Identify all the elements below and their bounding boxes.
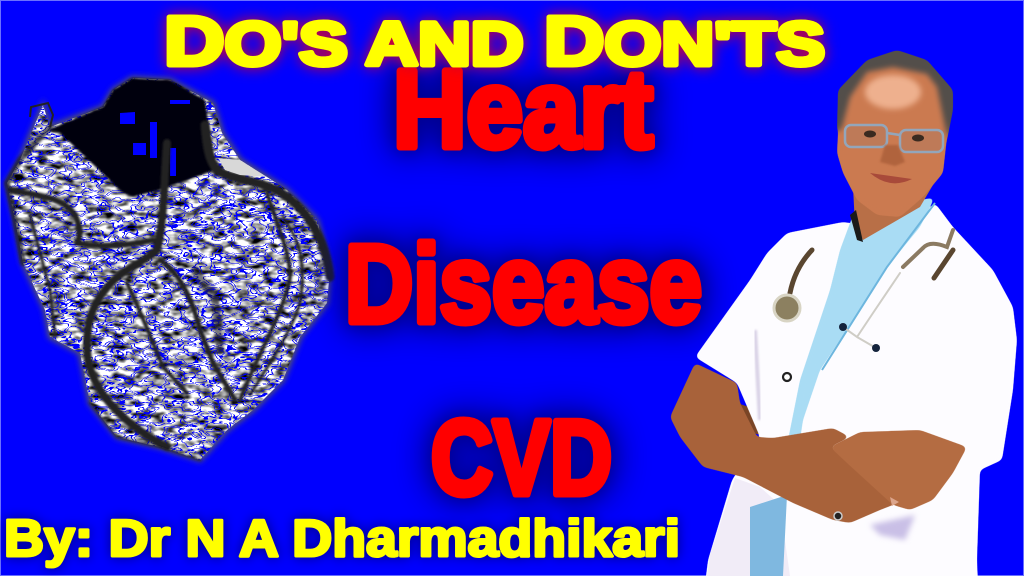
viewer-left arm and hand xyxy=(670,363,898,523)
face xyxy=(837,67,947,217)
collar shadow xyxy=(850,210,863,242)
pale highlight xyxy=(218,158,267,177)
eyes xyxy=(864,130,924,142)
dark aortic root region xyxy=(48,78,215,197)
aortic gaps xyxy=(120,100,190,176)
sleeve fold xyxy=(755,330,760,420)
heading: Disease: Disease xyxy=(345,223,702,346)
small vessel wisp xyxy=(30,103,53,127)
ring xyxy=(834,512,842,520)
coat shading xyxy=(870,515,915,540)
soft heart rim xyxy=(7,78,330,460)
heading: Heart: Heart xyxy=(393,48,653,171)
heart muscle surface xyxy=(0,70,340,470)
head xyxy=(837,50,953,217)
heading: CVD: CVD xyxy=(431,399,612,517)
blue shirt xyxy=(788,197,935,440)
byline: By: Dr N A Dharmadhikari xyxy=(4,510,680,568)
lower shirt xyxy=(750,495,787,576)
shirt placket edge xyxy=(822,203,935,370)
far arm behind xyxy=(737,403,768,437)
nose shadow xyxy=(880,145,905,166)
neck xyxy=(853,173,940,240)
coat button xyxy=(783,373,791,381)
viewer-right forearm xyxy=(830,430,967,510)
lower coat shade xyxy=(707,478,790,576)
glasses xyxy=(845,125,943,152)
title: Do's and Don'ts: DO'S AND DON'TS xyxy=(164,2,825,80)
illustration: heart with coronary arteries xyxy=(0,70,340,470)
hair xyxy=(837,50,953,150)
fingernail xyxy=(890,497,899,506)
forehead highlight xyxy=(865,75,921,109)
stethoscope xyxy=(774,230,953,352)
white coat xyxy=(695,203,1017,576)
coronary arteries xyxy=(7,125,330,460)
illustration: doctor xyxy=(670,50,1017,576)
mouth xyxy=(870,173,912,183)
